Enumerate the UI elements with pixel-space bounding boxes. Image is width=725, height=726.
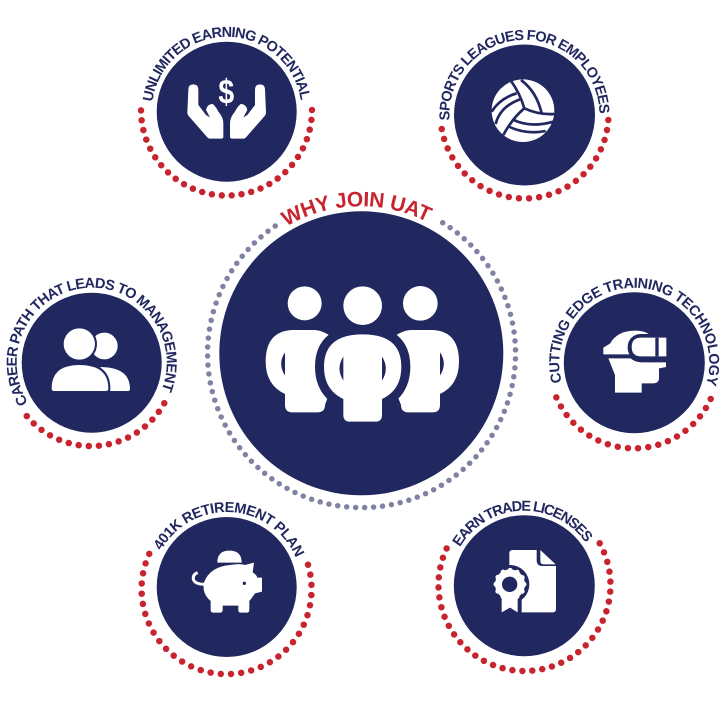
panel: why join UAT [204,192,518,510]
circle: retirement [157,517,297,657]
icon: three people [266,286,459,422]
icon: hands holding dollar [187,72,266,139]
icon: VR headset on head [603,331,669,393]
circle: sports [454,44,595,186]
panel: sports leagues for employees [438,30,612,202]
circle: earning [157,42,297,182]
label: career: CAREER PATH THAT LEADS TO MANAGEMENT [6,278,177,406]
icon: certificate document [491,550,556,615]
icon: hands holding dollar: $ [218,72,235,111]
panel: 401k retirement plan [138,502,315,678]
dotted arc: retirement [142,554,312,674]
dotted arc: earning [141,110,312,196]
icon: volleyball [492,79,554,142]
label: technology: CUTTING EDGE TRAINING TECHNOLOGY [549,278,720,387]
circle: licenses [454,515,595,656]
dotted ring: center [208,223,516,508]
dotted arc: career [27,403,164,446]
title: WHY JOIN UAT [280,192,434,225]
icon: piggy bank [193,551,262,613]
circle: center [219,211,503,495]
panel: earn trade licenses [435,500,614,674]
label: sports: SPORTS LEAGUES FOR EMPLOYEES [439,30,610,120]
panel: career path [6,278,177,450]
label: licenses: EARN TRADE LICENSES [452,500,592,546]
panel: cutting edge training technology [549,278,720,452]
label: retirement: 401K RETIREMENT PLAN [154,502,304,557]
icon: users [52,328,130,391]
panel: unlimited earning potential [138,26,316,199]
dotted arc: licenses [438,543,610,671]
circle: career [22,293,162,433]
dotted arc: technology [556,397,711,448]
circle: technology [564,292,705,433]
dotted arc: sports [442,120,608,198]
label: earning: UNLIMITED EARNING POTENTIAL [142,26,310,100]
